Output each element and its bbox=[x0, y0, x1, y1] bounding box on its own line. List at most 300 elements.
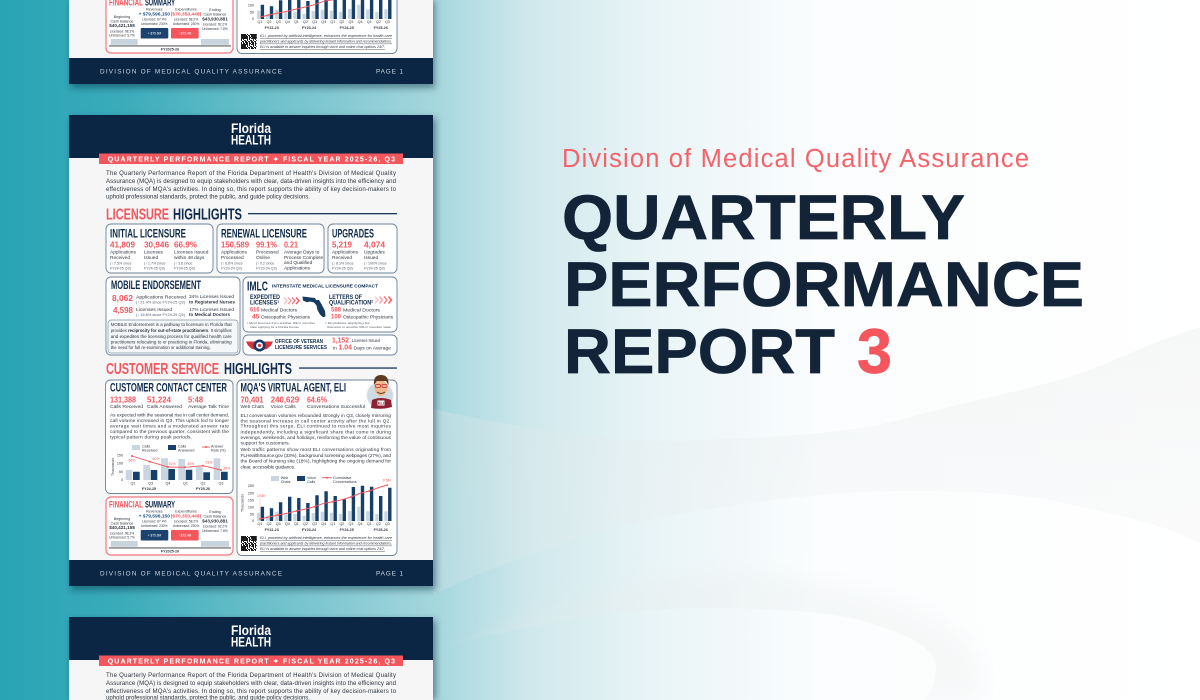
text: ELI summary: Web traffic patterns show most ELI conversations originating from bbox=[240, 447, 391, 453]
chart: ELI web chats and voice calls: Q3 bbox=[276, 522, 281, 526]
footer band bbox=[69, 560, 433, 586]
panel: customer contact center: 131,388 bbox=[110, 395, 136, 404]
panel: virtual agent ELI bbox=[237, 375, 397, 556]
panel: virtual agent ELI: Web Chats bbox=[240, 404, 265, 410]
chart: ELI web chats and voice calls: Q2 bbox=[376, 522, 381, 526]
icon: QR code bbox=[241, 536, 257, 551]
financial summary panel: Unlicensed: 7.8% bbox=[202, 27, 228, 31]
financial summary panel: ($70,350,448) bbox=[171, 12, 202, 18]
panel: financial summary: Cash Balance bbox=[204, 515, 226, 519]
ELI panel lower: FY23-24 bbox=[302, 26, 317, 30]
panel: initial licensure: 30,946 bbox=[144, 241, 170, 250]
chart: ELI web chats and voice calls: 0 bbox=[252, 519, 254, 523]
panel: IMLC: 616 bbox=[250, 307, 260, 313]
ELI panel lower: FY24-25 bbox=[340, 26, 354, 30]
footer band: DIVISION OF MEDICAL QUALITY ASSURANCE bbox=[100, 68, 282, 75]
panel: financial summary: Unlicensed: 7.8% bbox=[202, 529, 228, 533]
financial summary panel: - $75.4M bbox=[179, 32, 192, 36]
ELI panel lower: practitioners and applicants by delivering instant information and recommendations. bbox=[259, 39, 392, 44]
panel: initial licensure: FY24-25 Q3) bbox=[110, 266, 131, 270]
panel: mobile endorsement: 8,062 bbox=[112, 294, 134, 303]
panel: initial licensure: (↑ 7.5% since bbox=[110, 262, 132, 266]
intro paragraph: Assurance (MQA) is designed to equip stakeholders with clear, data-driven insights into the efficiency and bbox=[106, 178, 396, 185]
financial summary panel: $40,421,158 bbox=[109, 23, 135, 28]
panel: renewal licensure: Process Complete bbox=[284, 255, 324, 261]
financial summary panel: Expenditures bbox=[175, 8, 197, 12]
panel: upgrades: 5,219 bbox=[332, 241, 353, 250]
chart: ELI web chats and voice calls: Q3 bbox=[349, 522, 353, 526]
panel: IMLC: state applying for a Florida license bbox=[250, 325, 299, 329]
panel: financial summary: Revenues bbox=[146, 510, 163, 514]
panel: renewal licensure: Online bbox=[256, 255, 270, 261]
panel: initial licensure: (↑ 1.7% since bbox=[144, 262, 166, 266]
title: quarterly performance report 3: QUARTERLY bbox=[562, 183, 965, 253]
text: contact center summary bbox=[110, 412, 229, 440]
panel: renewal licensure bbox=[217, 224, 324, 273]
panel: mobile endorsement: 17% Licenses Issued bbox=[189, 307, 234, 313]
panel: customer contact center: Calls Answered bbox=[147, 404, 182, 410]
panel: initial licensure: (↑ 3.6 since bbox=[174, 262, 192, 266]
title: quarterly performance report 3: PERFORMANCE bbox=[564, 250, 1084, 320]
logo: Florida Health bbox=[231, 120, 271, 148]
panel: IMLC: LICENSES¹ bbox=[250, 300, 279, 307]
chart: ELI web chats and voice calls: Q3 bbox=[312, 522, 317, 526]
ELI panel lower: Q1 bbox=[367, 20, 372, 24]
intro paragraph bbox=[106, 672, 397, 700]
panel: IMLC: IMLC bbox=[247, 280, 268, 294]
icon: Florida map bbox=[302, 296, 326, 317]
chart: ELI web chats and voice calls: Q2 bbox=[267, 522, 272, 526]
chart: calls received and answered: Thousands bbox=[111, 458, 115, 476]
ELI panel lower: Q3 bbox=[349, 20, 353, 24]
chart: calls received and answered: 50 bbox=[119, 470, 123, 474]
title: quarterly performance report 3 bbox=[562, 183, 1084, 387]
page sheet bbox=[69, 115, 433, 586]
text: contact center summary: call volume increased in Q3. This uptick led to longer bbox=[110, 418, 229, 424]
panel: office of veteran licensure services bbox=[243, 335, 397, 355]
text: ELI summary: Throughout this surge, ELI continued to resolve most inquiries bbox=[240, 424, 392, 430]
financial summary panel: FY2025-26 bbox=[161, 48, 179, 52]
panel: upgrades: (↑ 100% since bbox=[364, 262, 387, 266]
heading: licensure highlights bbox=[106, 206, 397, 224]
report banner: QUARTERLY PERFORMANCE REPORT ✦ FISCAL YEAR 2025-26, Q3 bbox=[108, 658, 395, 666]
chart: calls received and answered: Calls bbox=[178, 444, 186, 448]
panel: renewal licensure: FY23-24 Q3) bbox=[256, 266, 277, 270]
chart: calls received and answered: Q3 bbox=[219, 482, 223, 486]
panel: IMLC: INTERSTATE MEDICAL LICENSURE COMPACT bbox=[272, 284, 378, 288]
financial summary panel: Licensed: 87.4% bbox=[142, 18, 167, 22]
ELI panel lower: 0 bbox=[252, 17, 254, 21]
panel: upgrades: FY24-25 Q3) bbox=[364, 266, 385, 270]
panel: financial summary: $40,421,158 bbox=[109, 525, 135, 530]
chart: ELI web chats and voice calls: Q1 bbox=[330, 522, 335, 526]
panel: renewal licensure: Average Days to bbox=[284, 250, 320, 256]
chart: ELI web chats and voice calls: Q4 bbox=[321, 522, 326, 526]
panel: mobile endorsement: Applications Received bbox=[136, 294, 186, 300]
text: contact center summary: As expected with the seasonal rise in call center demand, bbox=[110, 412, 229, 418]
chart: calls received and answered: 49% bbox=[187, 462, 194, 466]
ELI panel lower: ELI is available to answer inquiries through voice and online chat options 24/7. bbox=[260, 44, 385, 49]
report banner bbox=[99, 656, 403, 666]
heading: licensure highlights: LICENSURE bbox=[106, 206, 169, 224]
chart: ELI web chats and voice calls: Web bbox=[281, 476, 288, 480]
ELI panel lower: Q2 bbox=[376, 20, 381, 24]
panel: IMLC: EXPEDITED bbox=[250, 294, 280, 301]
ELI panel lower: 100 bbox=[248, 4, 254, 8]
intro paragraph: uphold professional standards, protect the public, and guide policy decisions. bbox=[106, 194, 310, 201]
heading: licensure highlights: HIGHLIGHTS bbox=[173, 206, 242, 224]
note: mobile endorsement description: and expedites the licensing process for qualified health care bbox=[111, 334, 232, 340]
chart: ELI web chats and voice calls: Q4 bbox=[285, 522, 290, 526]
panel: customer contact center bbox=[106, 380, 233, 494]
panel: office of veteran licensure services: 1,152 bbox=[332, 335, 349, 344]
background wave upper bbox=[433, 327, 1200, 700]
panel: initial licensure: Issued bbox=[144, 255, 158, 261]
footer band: DIVISION OF MEDICAL QUALITY ASSURANCE bbox=[100, 570, 282, 577]
chart: calls received and answered: Q4 bbox=[166, 482, 170, 486]
header band bbox=[69, 115, 433, 158]
panel: IMLC: Medical Doctors bbox=[343, 307, 381, 313]
panel: virtual agent ELI: 240,629 bbox=[271, 395, 300, 404]
financial summary panel: Cash Balance bbox=[111, 20, 133, 24]
panel: initial licensure: INITIAL LICENSURE bbox=[110, 228, 186, 240]
panel: IMLC: ² Floridians applying for bbox=[325, 321, 370, 325]
heading: customer service highlights: CUSTOMER SERVICE bbox=[106, 361, 219, 378]
report banner: QUARTERLY PERFORMANCE REPORT ✦ FISCAL YEAR 2025-26, Q3 bbox=[108, 156, 395, 164]
heading: customer service highlights: HIGHLIGHTS bbox=[224, 361, 292, 378]
ELI panel lower: Q4 bbox=[321, 20, 326, 24]
panel: IMLC bbox=[243, 277, 397, 332]
panel: upgrades: Applications bbox=[332, 250, 358, 256]
panel: renewal licensure: (↑ 6.8% since bbox=[221, 262, 243, 266]
chart: calls received and answered: FY25-26 bbox=[196, 487, 210, 491]
note: mobile endorsement description: practitioners relocating to or practicing in Florida, eliminating bbox=[111, 340, 232, 346]
title: quarterly performance report 3: 3 bbox=[857, 317, 892, 387]
chart: calls received and answered: 60% bbox=[152, 457, 160, 461]
text: ELI summary: clear, accessible guidance. bbox=[240, 464, 296, 470]
text: ELI summary: ELI conversation volumes rebounded strongly in Q3, closely mirroring bbox=[240, 413, 391, 419]
chart: calls received and answered: Q3 bbox=[148, 482, 153, 486]
financial summary panel: Licensed: 58.2% bbox=[174, 18, 198, 22]
chart: ELI web chats and voice calls: Q4 bbox=[358, 522, 363, 526]
chart: ELI web chats and voice calls: 200 bbox=[248, 492, 254, 496]
note: mobile endorsement description: MOBILE Endorsement is a pathway to licensure in Florida that bbox=[111, 322, 232, 328]
chart: calls received and answered: Rate (%) bbox=[211, 449, 226, 453]
panel: initial licensure: Applications bbox=[110, 250, 136, 256]
panel: financial summary: $43,930,881 bbox=[202, 519, 228, 524]
panel: mobile endorsement: MOBILE ENDORSEMENT bbox=[111, 280, 201, 292]
panel: mobile endorsement: 4,598 bbox=[113, 306, 134, 315]
panel: mobile endorsement: to Registered Nurses bbox=[189, 300, 235, 306]
panel: renewal licensure: 0.21 bbox=[284, 241, 298, 250]
ELI panel lower: Q4 bbox=[358, 20, 363, 24]
panel: financial summary: Licensed: 92.2% bbox=[203, 525, 227, 529]
chart: ELI web chats and voice calls: Cumulative bbox=[333, 476, 351, 480]
panel: office of veteran licensure services: in bbox=[333, 346, 337, 352]
chart: calls received and answered: 100 bbox=[117, 462, 123, 466]
panel: virtual agent ELI: 64.6% bbox=[307, 395, 327, 404]
panel: renewal licensure: FY23-24 Q3) bbox=[221, 266, 242, 270]
text: ELI disclaimer: ELI, powered by artificial intelligence, enhances the experience for health care bbox=[260, 535, 393, 540]
panel: financial summary: Beginning bbox=[114, 517, 130, 521]
intro paragraph: Assurance (MQA) is designed to equip stakeholders with clear, data-driven insights into the efficiency and bbox=[106, 680, 396, 687]
panel: office of veteran licensure services: OFFICE OF VETERAN bbox=[275, 339, 323, 345]
page shadow bbox=[71, 118, 436, 590]
panel: IMLC: QUALIFICATION² bbox=[329, 300, 374, 307]
icon: ELI avatar bbox=[366, 375, 394, 409]
panel: financial summary: Licensed: 58.2% bbox=[174, 520, 198, 524]
panel: financial summary: Unlicensed: 230% bbox=[173, 524, 199, 528]
panel: initial licensure bbox=[106, 224, 213, 273]
panel: IMLC: Osteopathic Physicians bbox=[343, 314, 394, 320]
financial summary panel: Unlicensed: 230% bbox=[141, 22, 168, 26]
panel: initial licensure: within 48 days bbox=[174, 255, 205, 261]
logo: Florida Health: Florida bbox=[231, 622, 271, 638]
chart: ELI web chats and voice calls: Conversations bbox=[333, 480, 357, 484]
panel: upgrades: UPGRADES bbox=[332, 228, 374, 240]
panel: renewal licensure: and Qualified bbox=[284, 260, 313, 266]
text: ELI summary bbox=[240, 413, 392, 470]
chart: ELI web chats and voice calls: Q1 bbox=[367, 522, 372, 526]
panel: financial summary: ($70,350,448) bbox=[171, 514, 202, 520]
chart: ELI web chats and voice calls: 100 bbox=[248, 505, 254, 509]
panel: customer contact center: Calls Received bbox=[110, 404, 143, 410]
panel: renewal licensure: Processed bbox=[256, 250, 279, 256]
panel: financial summary: Unlicensed: 230% bbox=[141, 524, 168, 528]
chart: ELI web chats and voice calls: FY22-23 bbox=[265, 528, 279, 532]
chart: calls received and answered: FY24-25 bbox=[142, 487, 156, 491]
ELI panel lower: Q2 bbox=[339, 20, 344, 24]
ELI panel lower: 50 bbox=[250, 10, 254, 14]
chart: ELI web chats and voice calls: 150 bbox=[248, 498, 254, 502]
chart: calls received and answered: 150 bbox=[117, 453, 123, 457]
text: ELI summary: the seasonal increase in call center activity after the lull in Q2. bbox=[240, 418, 391, 424]
chart: calls received and answered: Answered bbox=[178, 449, 194, 453]
background wave inner lobe bbox=[433, 608, 936, 700]
panel: customer contact center: CUSTOMER CONTACT CENTER bbox=[110, 383, 227, 395]
chart: ELI web chats and voice calls: 3.5M bbox=[382, 479, 391, 483]
panel: upgrades: Received bbox=[332, 255, 352, 261]
panel: IMLC: 45 bbox=[252, 314, 260, 320]
intro paragraph: The Quarterly Performance Report of the Florida Department of Health's Division of Medical Quality bbox=[106, 672, 397, 679]
panel: mobile endorsement bbox=[106, 277, 240, 355]
chart: ELI web chats and voice calls: FY23-24 bbox=[302, 528, 317, 532]
panel: IMLC: LETTERS OF bbox=[329, 294, 362, 301]
text: ELI summary: support for customers. bbox=[240, 440, 290, 446]
panel: upgrades: Issued bbox=[364, 255, 378, 261]
text: ELI summary: independently, including a significant share that come in during bbox=[240, 429, 391, 435]
panel: renewal licensure: 99.1% bbox=[256, 241, 277, 250]
chart: calls received and answered: 66% bbox=[128, 458, 136, 462]
panel: renewal licensure: 150,589 bbox=[221, 241, 250, 250]
ELI panel lower: Q1 bbox=[330, 20, 335, 24]
panel: initial licensure: FY24-25 Q3) bbox=[144, 266, 165, 270]
panel: financial summary: FINANCIAL bbox=[109, 500, 143, 511]
panel: upgrades: 4,074 bbox=[364, 241, 386, 250]
logo: Florida Health bbox=[231, 622, 271, 650]
background wave white lobe bbox=[433, 491, 1200, 700]
panel: customer contact center: 51,224 bbox=[147, 395, 172, 404]
financial summary panel: Cash Balance bbox=[204, 13, 226, 17]
title: quarterly performance report 3: REPORT bbox=[564, 317, 835, 387]
intro paragraph: The Quarterly Performance Report of the Florida Department of Health's Division of Medical Quality bbox=[106, 170, 397, 177]
panel: customer contact center: Average Talk Time bbox=[188, 404, 229, 410]
text: ELI disclaimer: ELI is available to answer inquiries through voice and online chat options 24/7. bbox=[260, 546, 385, 551]
footer band: PAGE 1 bbox=[376, 570, 403, 577]
chart: calls received and answered: 53% bbox=[205, 460, 213, 464]
chart: ELI web chats and voice calls: 250 bbox=[248, 484, 254, 488]
chart: calls received and answered: Q2 bbox=[131, 482, 135, 486]
icon: ELI avatar: ELI bbox=[378, 401, 384, 406]
financial summary panel: $43,930,881 bbox=[202, 17, 228, 22]
ELI panel lower: Q1 bbox=[258, 20, 262, 24]
panel: IMLC: licensure in another IMLC member state bbox=[327, 325, 391, 329]
panel: renewal licensure: (↑ 0.2 since bbox=[256, 262, 274, 266]
ELI panel lower: Q2 bbox=[267, 20, 272, 24]
footer band: PAGE 1 bbox=[376, 68, 403, 75]
panel: upgrades: FY24-25 Q3) bbox=[332, 266, 353, 270]
financial summary panel: Revenues bbox=[146, 8, 163, 12]
panel: mobile endorsement: 34% Licenses Issued bbox=[189, 294, 234, 300]
ELI panel lower: ELI, powered by artificial intelligence, enhances the experience for health care bbox=[260, 33, 393, 38]
panel: initial licensure: Licenses Issued bbox=[174, 250, 209, 256]
chart: calls received and answered: 0 bbox=[121, 478, 123, 482]
panel: financial summary: FY2025-26 bbox=[161, 550, 179, 554]
panel: customer contact center: 5:48 bbox=[188, 395, 204, 404]
chart: ELI web chats and voice calls: Q2 bbox=[339, 522, 344, 526]
panel: financial summary: SUMMARY bbox=[145, 500, 175, 511]
chart: calls received and answered: Calls bbox=[142, 444, 150, 448]
panel: IMLC: Osteopathic Physicians bbox=[261, 314, 311, 320]
panel: initial licensure: 66.9% bbox=[174, 241, 197, 250]
panel: financial summary: Licensed: 98.3% bbox=[110, 531, 134, 535]
chart: ELI web chats and voice calls: Thousands bbox=[240, 494, 244, 512]
chart: ELI web chats and voice calls: FY24-25 bbox=[340, 528, 354, 532]
ELI panel lower: Q2 bbox=[303, 20, 308, 24]
chart: ELI web chats and voice calls: FY25-26 bbox=[374, 528, 388, 532]
subtitle: division name: Division of Medical Quality Assurance bbox=[562, 145, 1029, 173]
ELI panel lower: Q4 bbox=[285, 20, 290, 24]
panel: office of veteran licensure services: 1.04 bbox=[338, 343, 353, 352]
icon: chevron arrows right bbox=[375, 296, 392, 304]
financial summary panel: Unlicensed: 5.7% bbox=[109, 34, 135, 38]
panel: mobile endorsement: Licenses Issued bbox=[136, 307, 172, 313]
panel: mobile endorsement: to Medical Doctors bbox=[189, 312, 230, 318]
panel: initial licensure: Licenses bbox=[144, 250, 164, 256]
chart: calls received and answered: Answer bbox=[211, 444, 224, 448]
panel: initial licensure: FY24-25 Q3) bbox=[174, 266, 195, 270]
panel: upgrades: Upgrades bbox=[364, 250, 385, 256]
panel: renewal licensure: RENEWAL LICENSURE bbox=[221, 228, 307, 240]
footer band bbox=[69, 58, 433, 84]
chart: ELI web chats and voice calls: Q3 bbox=[385, 522, 390, 526]
text: ELI summary: the Board of Nursing site (18%), highlighting the ongoing demand for bbox=[240, 458, 391, 464]
report banner bbox=[99, 154, 403, 164]
panel: initial licensure: Received bbox=[110, 255, 130, 261]
ELI panel lower: FY25-26 bbox=[374, 26, 388, 30]
panel: financial summary: + $79,596,150 bbox=[139, 514, 170, 520]
text: contact center summary: typical pattern during peak periods. bbox=[110, 434, 192, 440]
panel: financial summary: Ending bbox=[209, 510, 221, 514]
page: bottom cropped report page bbox=[69, 617, 436, 700]
panel: renewal licensure: Applications bbox=[284, 265, 310, 271]
text: contact center summary: compared to the previous quarter, consistent with the bbox=[110, 429, 229, 435]
panel: financial summary: Expenditures bbox=[175, 510, 197, 514]
chart: calls received and answered: Q2 bbox=[201, 482, 205, 486]
text: ELI summary: evenings, weekends, and holidays, reinforcing the value of continuous bbox=[240, 435, 392, 441]
panel: renewal licensure: Applications bbox=[221, 250, 247, 256]
chart: ELI web chats and voice calls: 193K bbox=[257, 494, 266, 498]
financial summary panel bbox=[106, 0, 233, 53]
financial summary panel: Ending bbox=[209, 8, 221, 12]
logo: Florida Health: HEALTH bbox=[231, 132, 271, 148]
panel: IMLC: 100 bbox=[331, 314, 342, 320]
note: mobile endorsement description: provides reciprocity for out-of-state practitioners. It simplifies bbox=[111, 328, 232, 334]
financial summary panel: Unlicensed: 230% bbox=[173, 22, 199, 26]
ELI panel lower: Q1 bbox=[294, 20, 299, 24]
logo: Florida Health: HEALTH bbox=[231, 634, 271, 650]
chart: ELI web chats and voice calls: Chats bbox=[281, 480, 290, 484]
panel: virtual agent ELI: Voice Calls bbox=[271, 404, 296, 410]
chart: ELI web chats and voice calls bbox=[240, 476, 392, 532]
logo: Florida Health: Florida bbox=[231, 120, 271, 136]
ELI panel lower: Q3 bbox=[312, 20, 317, 24]
page: main report page bbox=[69, 115, 436, 590]
page: top cropped report page bbox=[69, 0, 435, 88]
panel: financial summary: Unlicensed: 5.7% bbox=[109, 536, 135, 540]
chart: ELI web chats and voice calls: Q1 bbox=[258, 522, 262, 526]
panel: office of veteran licensure services: Days on Average bbox=[354, 346, 391, 352]
icon: veteran wings badge bbox=[246, 340, 273, 352]
panel: mobile endorsement: (↑ 21.4% since FY24-25 Q3) bbox=[136, 300, 185, 304]
intro paragraph: effectiveness of MQA's activities. In doing so, this report supports the ability of key decision-makers to bbox=[106, 688, 397, 695]
panel: initial licensure: 41,809 bbox=[110, 241, 136, 250]
text: ELI summary: FLHealthSource.gov (33%), background screening webpages (27%), and bbox=[240, 453, 391, 459]
panel: mobile endorsement: (↑ 16.6% since FY24-25 Q3) bbox=[136, 313, 185, 317]
panel: office of veteran licensure services: LICENSURE SERVICES bbox=[275, 345, 328, 351]
chart: calls received and answered: 51% bbox=[168, 462, 176, 466]
ELI panel lower bbox=[237, 0, 397, 54]
chart: calls received and answered: Received bbox=[142, 449, 157, 453]
panel: virtual agent ELI: MQA'S VIRTUAL AGENT, ELI bbox=[240, 383, 346, 395]
intro paragraph bbox=[106, 170, 397, 201]
background wave soft grey band bbox=[433, 572, 983, 700]
note: mobile endorsement description: the need for full re-examination or additional training. bbox=[111, 345, 211, 351]
panel: virtual agent ELI: Conversations Successful bbox=[307, 404, 365, 410]
text: ELI disclaimer bbox=[259, 535, 393, 551]
chart: calls received and answered bbox=[111, 444, 230, 491]
financial summary panel: + $75.6M bbox=[148, 32, 162, 36]
ELI panel lower: Q3 bbox=[385, 20, 390, 24]
panel: financial summary: + $75.6M bbox=[148, 534, 162, 538]
chart: ELI web chats and voice calls: Q1 bbox=[294, 522, 299, 526]
chart: calls received and answered: Q1 bbox=[183, 482, 188, 486]
panel: IMLC: Medical Doctors bbox=[261, 307, 298, 313]
panel: virtual agent ELI: 70,401 bbox=[240, 395, 264, 404]
chart: ELI web chats and voice calls: Q2 bbox=[303, 522, 308, 526]
chart: ELI web chats and voice calls: 50 bbox=[250, 512, 254, 516]
panel: upgrades bbox=[328, 224, 397, 273]
panel: financial summary: - $75.4M bbox=[179, 534, 192, 538]
panel: financial summary: Licensed: 87.4% bbox=[142, 520, 167, 524]
panel: financial summary: Cash Balance bbox=[111, 522, 133, 526]
financial summary panel: Licensed: 92.2% bbox=[203, 23, 227, 27]
panel: financial summary bbox=[106, 497, 233, 555]
ELI panel lower: FY22-23 bbox=[265, 26, 279, 30]
icon: chevron arrows left bbox=[284, 298, 299, 304]
panel: renewal licensure: Processed bbox=[221, 255, 244, 261]
panel: office of veteran licensure services: Licenses Issued bbox=[352, 338, 380, 344]
